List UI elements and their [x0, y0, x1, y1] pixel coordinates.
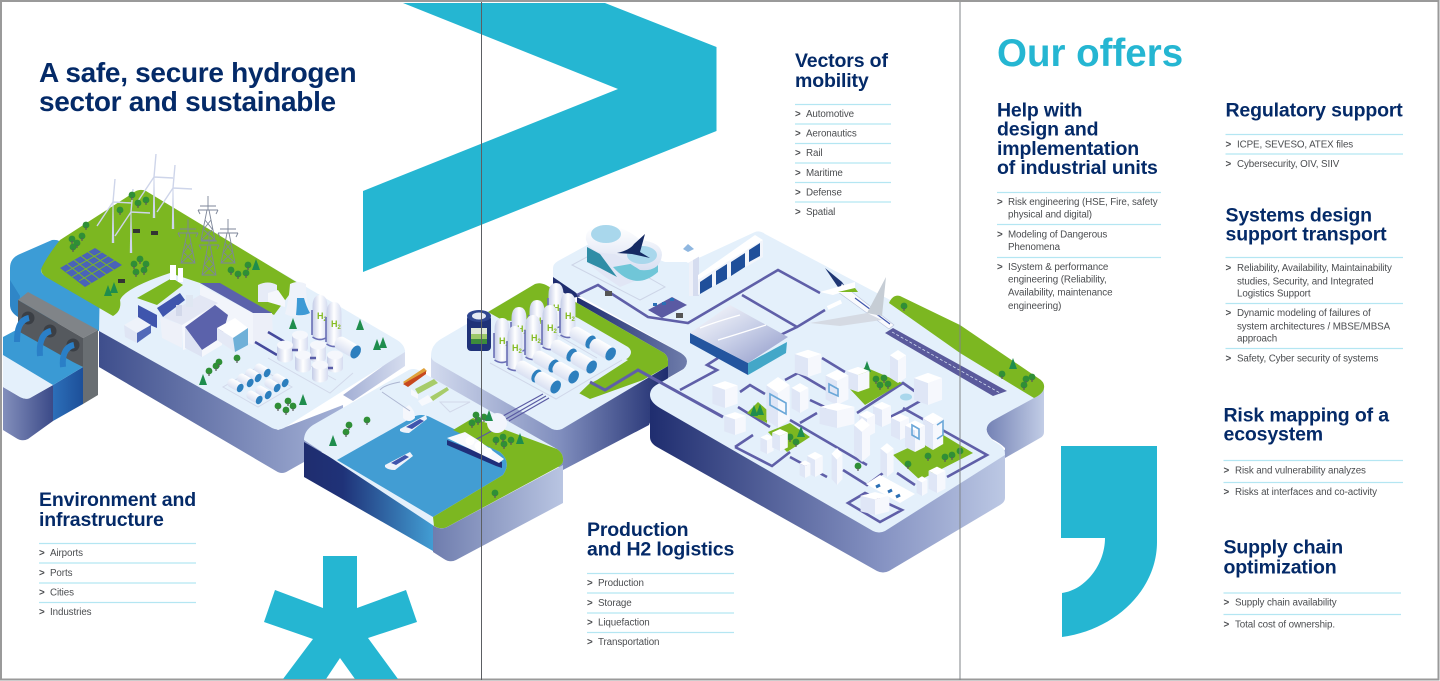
domed building with aircraft — [572, 225, 665, 300]
list: studies, Security, and Integrated — [1237, 276, 1373, 287]
tank label: H — [512, 343, 518, 353]
list: Reliability, Availability, Maintainability — [1237, 263, 1392, 274]
list — [795, 104, 891, 218]
list: Availability, maintenance — [1008, 288, 1113, 299]
list — [1226, 258, 1403, 365]
tank label: H — [517, 324, 524, 334]
list: > — [1224, 487, 1230, 498]
harbour trees — [329, 410, 524, 498]
list — [1224, 460, 1403, 498]
pipelines — [475, 394, 549, 440]
right platform: back notch — [553, 268, 582, 298]
heading: optimization — [1224, 556, 1337, 578]
title: A safe, secure hydrogen — [39, 57, 356, 88]
list: > — [997, 229, 1003, 240]
tank label: 2 — [554, 329, 558, 335]
heading: support transport — [1226, 224, 1387, 246]
list: > — [997, 262, 1003, 273]
control tower — [678, 244, 700, 296]
title: sector and sustainable — [39, 86, 336, 117]
aircraft hangar — [690, 305, 788, 375]
panel: environment and infrastructure — [39, 489, 196, 618]
heading: design and — [997, 119, 1098, 141]
list: Defense — [806, 188, 842, 198]
list: > — [39, 607, 45, 618]
list: engineering) — [1008, 301, 1061, 312]
list — [39, 544, 196, 618]
panel: vectors of mobility — [795, 50, 891, 218]
list: > — [1226, 140, 1232, 150]
list: Risk engineering (HSE, Fire, safety — [1008, 197, 1158, 208]
list: > — [39, 588, 45, 598]
panel: supply chain — [1224, 536, 1401, 630]
passenger plane — [810, 268, 894, 329]
list: > — [795, 188, 801, 198]
list: Production — [598, 578, 644, 589]
list: Supply chain availability — [1235, 598, 1337, 609]
H2 storage tanks: left platform — [312, 295, 363, 360]
list — [587, 574, 734, 648]
panel: risk mapping — [1224, 405, 1403, 498]
left platform: dam and river — [3, 240, 113, 440]
decorative cyan chevron — [363, 3, 716, 272]
road network — [577, 270, 987, 522]
list: > — [1226, 159, 1232, 170]
middle platform: green area — [488, 283, 668, 399]
tank label: 2 — [560, 309, 564, 315]
list: > — [795, 168, 801, 179]
list: > — [587, 618, 593, 628]
tank label: H — [535, 316, 542, 326]
industrial plant — [124, 265, 290, 357]
list: Automotive — [806, 109, 855, 120]
list: > — [997, 197, 1003, 208]
list: Storage — [598, 598, 632, 609]
tank label: H — [331, 319, 338, 329]
heading: our offers: Our offers — [997, 32, 1183, 75]
cooling tower and utility tanks — [258, 282, 310, 317]
harbour green land — [433, 418, 563, 528]
tank label: H — [531, 333, 538, 343]
list: Modeling of Dangerous — [1008, 229, 1107, 240]
heading: infrastructure — [39, 509, 164, 531]
list — [1226, 134, 1403, 170]
list: Logistics Support — [1237, 289, 1311, 300]
list: Cities — [50, 588, 74, 598]
tank label: 2 — [338, 325, 342, 331]
list: > — [795, 207, 801, 218]
list: Safety, Cyber security of systems — [1237, 354, 1379, 365]
runway — [885, 328, 1007, 396]
title — [39, 57, 356, 117]
meadow trees and cows — [69, 192, 260, 296]
heading: and H2 logistics — [587, 538, 734, 560]
list: > — [1226, 263, 1232, 274]
tank label: 2 — [542, 322, 546, 328]
list: ICPE, SEVESO, ATEX files — [1237, 140, 1353, 150]
tank label: 2 — [538, 339, 542, 345]
list: Cybersecurity, OIV, SIIV — [1237, 159, 1340, 170]
list: Risks at interfaces and co-activity — [1235, 487, 1377, 498]
heading — [1224, 405, 1389, 446]
wind turbines — [97, 154, 192, 253]
list: > — [1224, 465, 1230, 476]
list — [997, 192, 1161, 312]
heading: Supply chain — [1224, 536, 1343, 558]
harbour water — [337, 415, 507, 517]
list: Dynamic modeling of failures of — [1237, 308, 1371, 319]
list: > — [795, 128, 801, 140]
heading: Systems design — [1226, 205, 1372, 227]
heading: ecosystem — [1224, 424, 1323, 446]
logistics pad: surface — [304, 369, 563, 528]
list: Ports — [50, 568, 73, 579]
heading — [1226, 205, 1387, 246]
right platform: side wall — [650, 395, 1005, 572]
list: > — [1224, 619, 1230, 630]
left platform: meadow — [41, 190, 298, 316]
tank label: 2 — [572, 317, 576, 323]
tank label: H — [499, 336, 506, 346]
heading — [997, 100, 1158, 179]
list: > — [39, 548, 45, 559]
list: Rail — [806, 148, 822, 159]
logistics pad and water block: side walls — [304, 442, 563, 561]
list: > — [39, 568, 45, 579]
hydrogen battery cylinder — [467, 310, 491, 351]
list: system architectures / MBSE/MBSA — [1237, 321, 1391, 332]
list: > — [587, 637, 593, 648]
list: > — [1224, 598, 1230, 609]
list: ISystem & performance — [1008, 262, 1109, 273]
heading — [1224, 536, 1343, 578]
list: physical and digital) — [1008, 210, 1092, 221]
green strip by the runway — [889, 296, 1044, 398]
H2 storage tanks: middle platform — [494, 283, 618, 395]
list: Spatial — [806, 207, 835, 218]
isometric illustration — [3, 154, 1044, 572]
list: > — [795, 148, 801, 159]
decorative cyan comma — [1061, 446, 1157, 637]
solar panels — [60, 248, 122, 287]
heading: Help with — [997, 100, 1082, 122]
list: Industries — [50, 607, 92, 618]
list: Total cost of ownership. — [1235, 619, 1335, 630]
list: > — [1226, 354, 1232, 365]
plant storage cylinders and plots — [223, 330, 353, 407]
heading: mobility — [795, 70, 869, 92]
panel: regulatory support — [1226, 100, 1403, 170]
city blocks — [712, 350, 945, 515]
list: > — [1226, 308, 1232, 319]
train and tanker trucks — [380, 368, 470, 412]
plant trees — [199, 318, 387, 415]
parking lot — [866, 475, 915, 503]
list: > — [795, 109, 801, 120]
list: Airports — [50, 548, 83, 559]
panel: production and H2 logistics — [587, 519, 734, 648]
tank label: H — [565, 311, 572, 321]
LNG carrier ship — [447, 432, 504, 468]
heading: implementation — [997, 138, 1139, 160]
electricity pylons — [178, 196, 238, 275]
heading — [39, 489, 196, 531]
list: Aeronautics — [806, 128, 857, 140]
list: Liquefaction — [598, 618, 650, 628]
list: engineering (Reliability, — [1008, 275, 1107, 286]
tank label: 2 — [524, 330, 528, 336]
tank label: 2 — [518, 349, 522, 355]
heading: Vectors of — [795, 50, 888, 72]
list — [1224, 593, 1401, 630]
middle platform: surface — [431, 283, 668, 430]
left platform: side wall — [99, 330, 343, 473]
airport apron vehicles — [605, 291, 687, 318]
road into the city — [590, 370, 723, 417]
list: > — [587, 598, 593, 609]
panel: help with design — [997, 100, 1161, 312]
list: Maritime — [806, 168, 843, 179]
heading: Environment and — [39, 489, 196, 511]
list: Transportation — [598, 637, 659, 648]
tank label: H — [317, 311, 324, 321]
list: approach — [1237, 334, 1277, 345]
panel: systems design — [1226, 205, 1403, 365]
tank label: 2 — [324, 317, 328, 323]
small tanker ships — [385, 405, 427, 470]
heading: of industrial units — [997, 157, 1158, 179]
heading: Production — [587, 519, 688, 541]
heading: Risk mapping of a — [1224, 405, 1389, 427]
tank label: 2 — [506, 342, 510, 348]
heading — [795, 50, 888, 92]
heading: Regulatory support — [1226, 100, 1403, 122]
list: Phenomena — [1008, 242, 1061, 253]
list: Risk and vulnerability analyzes — [1235, 465, 1366, 476]
airport terminal — [698, 235, 763, 295]
middle platform: storage plot — [488, 310, 631, 412]
left platform: top surface — [99, 190, 405, 430]
heading — [587, 519, 734, 560]
tank label: H — [553, 303, 560, 313]
city green patches — [747, 303, 1035, 480]
right platform: surface — [553, 231, 1044, 533]
decorative cyan asterisk — [264, 556, 417, 679]
middle platform: side wall — [431, 356, 668, 470]
LNG sphere — [487, 413, 507, 433]
list: > — [587, 578, 593, 589]
tank label: H — [547, 323, 554, 333]
